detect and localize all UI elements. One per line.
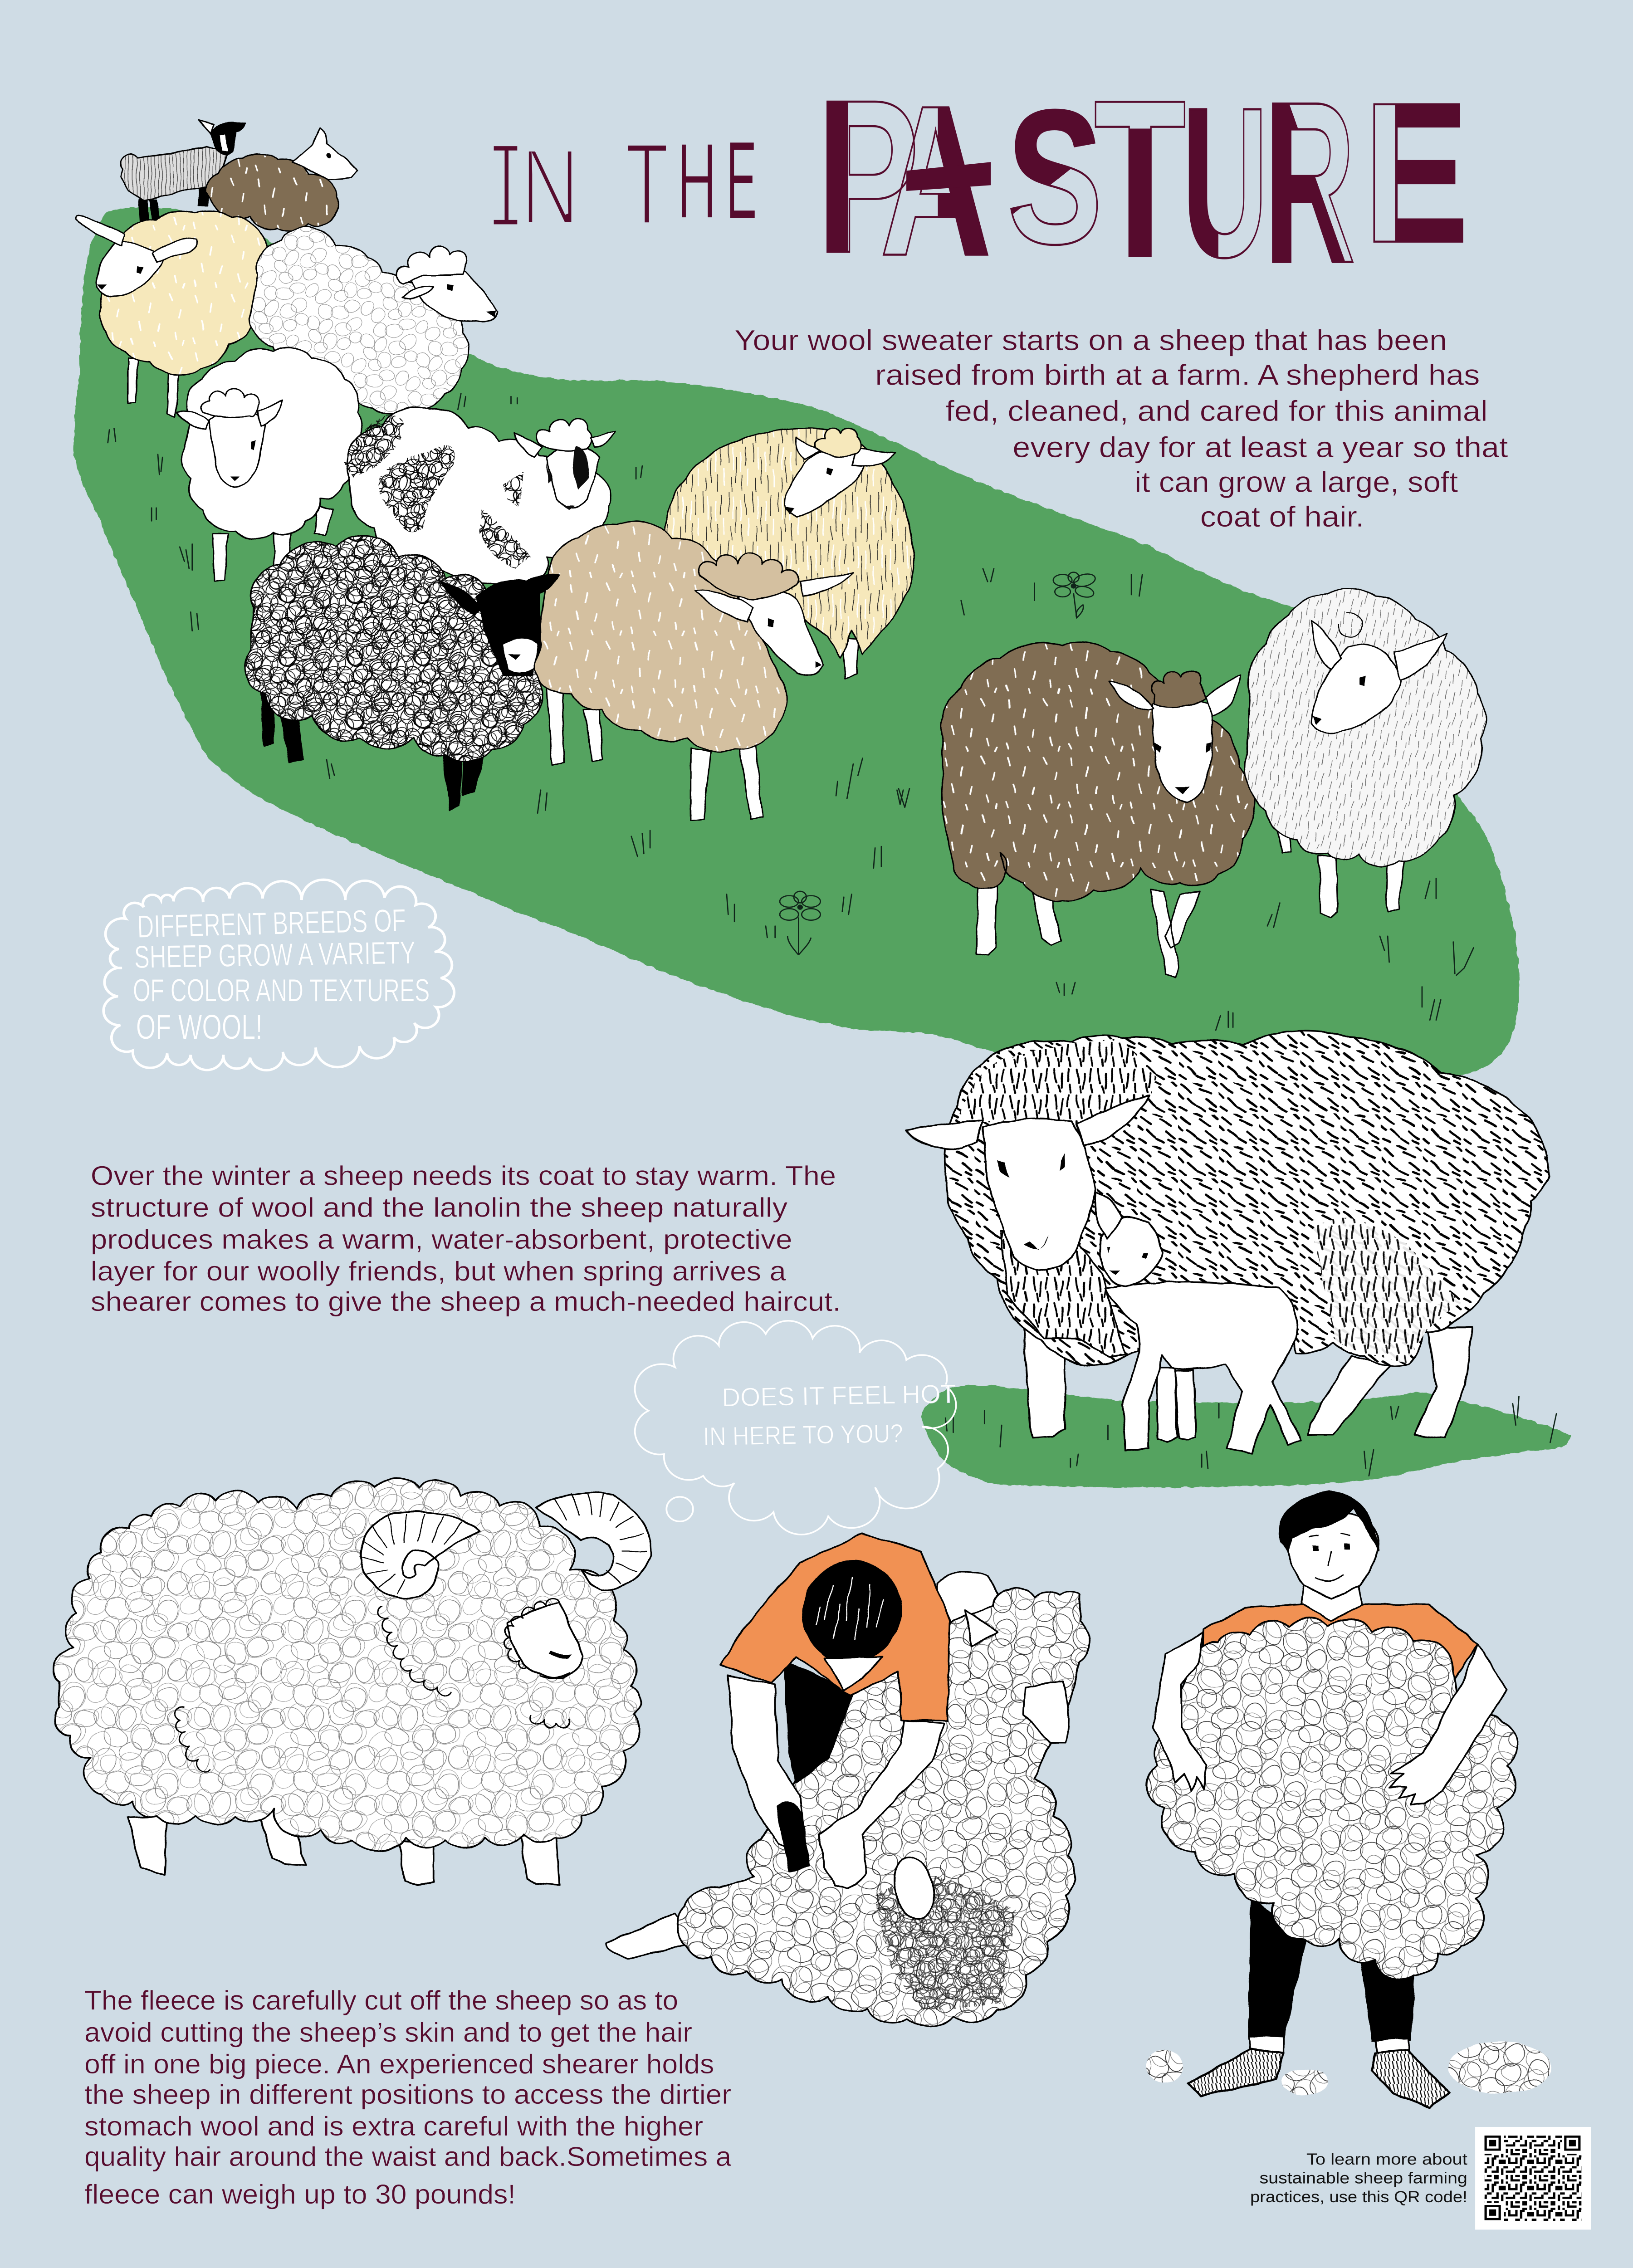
- sheep: curly dark body: [245, 536, 543, 810]
- sheep: cream with white face: [76, 210, 268, 417]
- text block: wool sweater intro: it can grow a large, soft: [1134, 466, 1458, 499]
- clipper: [777, 1802, 809, 1871]
- flock of sheep: [76, 120, 1486, 977]
- text block: wool sweater intro: [734, 324, 1508, 533]
- callout: different breeds: [103, 880, 454, 1070]
- fleece: [1147, 1618, 1517, 1980]
- text block: wool sweater intro: coat of hair.: [1200, 501, 1364, 533]
- lamb body: [1105, 1282, 1302, 1453]
- darker wool: [875, 1876, 1016, 2011]
- face: [508, 1603, 583, 1678]
- sheep: white front facing: [176, 348, 362, 582]
- text block: shearing: the sheep in different positions to access the dirtier: [84, 2079, 731, 2110]
- title: [494, 54, 1468, 311]
- pasture: A: [880, 61, 992, 300]
- in the: [494, 118, 757, 249]
- text block: wool sweater intro: Your wool sweater starts on a sheep that has been: [734, 324, 1447, 357]
- left horn: [361, 1511, 480, 1598]
- grass tufts: [108, 394, 1474, 1030]
- pasture: T: [1094, 54, 1186, 304]
- meadow patch: [920, 1385, 1570, 1487]
- sheep: long haired cream: [664, 428, 914, 679]
- in the: T: [625, 118, 669, 249]
- text block: shearing: avoid cutting the sheep’s skin and to get the hair: [84, 2017, 692, 2048]
- bubble text: IN HERE TO YOU?: [703, 1419, 903, 1451]
- text block: shearing: quality hair around the waist and back.Sometimes a: [84, 2141, 732, 2172]
- hair: [1280, 1492, 1378, 1551]
- hair: [793, 1553, 910, 1671]
- text block: shearing: off in one big piece. An experienced shearer holds: [84, 2049, 714, 2079]
- ram legs: [128, 1807, 559, 1885]
- text block: wool sweater intro: fed, cleaned, and cared for this animal: [945, 396, 1488, 428]
- QR caption: To learn more about: [1306, 2150, 1467, 2168]
- QR caption: sustainable sheep farming: [1260, 2169, 1467, 2187]
- shirt: [1203, 1604, 1478, 1678]
- pasture: U: [1182, 63, 1268, 302]
- bubble dot: [666, 1497, 693, 1521]
- left arm and hand: [1153, 1632, 1207, 1791]
- callout text: [133, 903, 430, 1046]
- face below hair: [825, 1657, 883, 1690]
- pasture: P: [817, 54, 919, 298]
- neck: [1302, 1584, 1363, 1623]
- text block: shearing: fleece can weigh up to 30 pounds!: [84, 2179, 516, 2210]
- shoes: [1188, 2049, 1448, 2108]
- face wool fringe: [504, 1598, 559, 1668]
- text block: winter coat: Over the winter a sheep needs its coat to stay warm. The: [91, 1161, 836, 1191]
- sheep knee: [889, 1853, 940, 1923]
- pasture: green hill: [73, 207, 1519, 1100]
- text block: wool sweater intro: raised from birth at a farm. A shepherd has: [875, 359, 1480, 391]
- ram shoulder and rump shading: [175, 1606, 569, 1771]
- socks: [1249, 2036, 1409, 2058]
- sheep: black head of curly sheep: [440, 574, 559, 676]
- tufts: [945, 1396, 1556, 1476]
- sheep horn: [936, 1571, 1009, 1628]
- callout text: SHEEP GROW A VARIETY: [134, 935, 416, 975]
- text block: winter coat: shearer comes to give the sheep a much-needed haircut.: [91, 1286, 841, 1317]
- ears: [906, 1095, 1149, 1149]
- QR code: [1475, 2127, 1591, 2229]
- thought bubble: [635, 1321, 956, 1535]
- pasture: R: [1264, 54, 1355, 311]
- wool tufts on ground: [1145, 2042, 1552, 2095]
- text block: winter coat: [91, 1161, 841, 1317]
- curly ram: [54, 1478, 652, 1885]
- right arm and hand: [819, 1721, 944, 1888]
- flowers: [780, 572, 1097, 955]
- lamb legs: [1156, 1367, 1195, 1441]
- face: [983, 1119, 1095, 1271]
- sheep: white hatched: [1245, 589, 1486, 917]
- orange shirt: [720, 1534, 950, 1721]
- pasture: S: [1007, 70, 1103, 284]
- in the: I: [500, 126, 513, 248]
- ear: [966, 1610, 997, 1647]
- text block: shearing: [84, 1985, 732, 2210]
- QR caption: [1250, 2150, 1467, 2206]
- sheep: white with dark scribbles: [344, 407, 616, 585]
- sheep fleece: [677, 1588, 1090, 2027]
- sheep: brown: [941, 642, 1255, 977]
- text block: winter coat: structure of wool and the lanolin the sheep naturally: [91, 1193, 788, 1223]
- bubble text: [703, 1379, 956, 1451]
- in the: H: [677, 120, 717, 242]
- text block: winter coat: layer for our woolly friends, but when spring arrives a: [91, 1256, 787, 1286]
- sheep: white curly, head right: [250, 227, 499, 415]
- bubble text: DOES IT FEEL HOT: [722, 1379, 956, 1412]
- legs: [1249, 1898, 1414, 2040]
- right arm and hand: [1389, 1644, 1506, 1804]
- sheep: tan: [533, 521, 853, 821]
- mane: [959, 1039, 1156, 1126]
- sheep face: [1023, 1681, 1068, 1744]
- sheep hind leg: [606, 1913, 695, 1959]
- sheep: small brown: [205, 127, 358, 231]
- shearer with sheep: [606, 1534, 1090, 2027]
- big sheep with lamb: [906, 1031, 1570, 1487]
- text block: shearing: The fleece is carefully cut off the sheep so as to: [84, 1985, 678, 2016]
- pasture: E: [1364, 61, 1468, 284]
- text block: shearing: stomach wool and is extra careful with the higher: [84, 2111, 703, 2142]
- left arm: [728, 1676, 807, 1855]
- sheep: small grey: [121, 120, 245, 226]
- callout text: DIFFERENT BREEDS OF: [137, 903, 406, 944]
- eyes and mouth: [1313, 1544, 1350, 1551]
- callout text: OF WOOL!: [136, 1007, 263, 1046]
- bubble outline: [635, 1321, 956, 1535]
- in the: E: [726, 118, 757, 242]
- cloud outline: [103, 880, 454, 1070]
- text block: wool sweater intro: every day for at least a year so that: [1012, 431, 1508, 464]
- lamb head: [1100, 1218, 1163, 1286]
- big sheep legs: [1023, 1324, 1472, 1438]
- ram fleece: [54, 1478, 640, 1852]
- facial features: [997, 1153, 1066, 1250]
- hip patch: [1313, 1218, 1461, 1363]
- head: [1286, 1512, 1379, 1599]
- big sheep body: [944, 1031, 1549, 1367]
- callout text: OF COLOR AND TEXTURES: [133, 973, 430, 1008]
- horn ridges: [555, 1493, 647, 1584]
- QR caption: practices, use this QR code!: [1250, 2188, 1467, 2206]
- right horn: [536, 1493, 652, 1590]
- man holding fleece: [1145, 1492, 1552, 2108]
- pasture: [817, 54, 1468, 311]
- dark torso: [784, 1661, 853, 1783]
- in the: N: [520, 126, 580, 248]
- text block: winter coat: produces makes a warm, water-absorbent, protective: [91, 1224, 792, 1255]
